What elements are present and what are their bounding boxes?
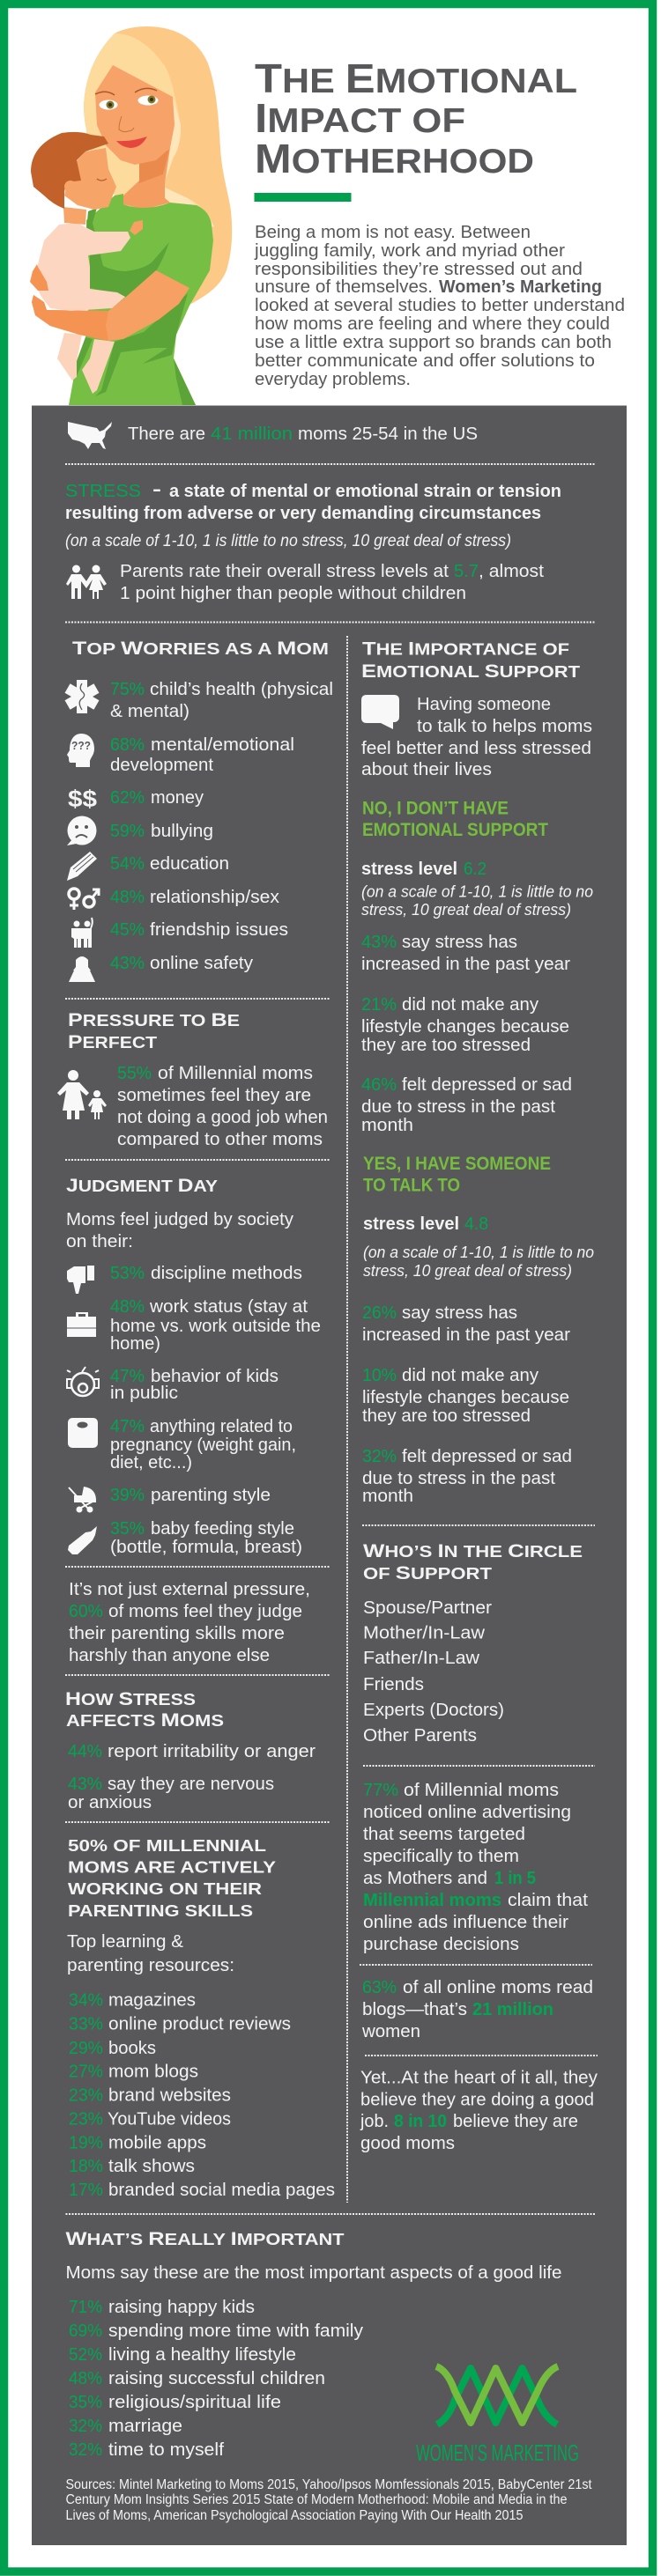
list: good life aspects: raising happy kids	[108, 2297, 255, 2317]
list: resources: 27%	[69, 2061, 103, 2082]
section: no emotional support: 21%	[361, 994, 397, 1015]
section: someone to talk to: TO TALK TO	[363, 1175, 460, 1196]
worry: friendship: 45%	[110, 919, 145, 940]
sources: Sources: Mintel Marketing to Moms 2015, Yahoo/Ipsos Momfessionals 2015, BabyCenter 21st	[65, 2477, 592, 2492]
list: resources: 18%	[69, 2156, 103, 2176]
list: resources: 29%	[69, 2038, 103, 2058]
section: someone to talk to: lifestyle changes because	[362, 1387, 569, 1407]
list: good life aspects: 32%	[69, 2416, 102, 2436]
judged: behavior of kids: in public	[110, 1383, 178, 1403]
list: good life aspects: religious/spiritual life	[108, 2392, 281, 2412]
text block: good moms: believe they are doing a good	[360, 2089, 594, 2110]
dress shading	[77, 208, 196, 405]
section: no emotional support: lifestyle changes because	[361, 1016, 569, 1037]
intro paragraph: Being a mom is not easy. Between	[255, 223, 531, 242]
section: no emotional support: increased in the past year	[361, 954, 570, 974]
section: someone to talk to: they are too stressed	[362, 1406, 531, 1426]
judged: work status: work status (stay at	[149, 1296, 308, 1317]
section: someone to talk to: 26%	[362, 1303, 397, 1323]
baby body	[37, 223, 130, 311]
section: circle of support: Spouse/Partner	[363, 1598, 492, 1618]
text block: online advertising: online ads influence their	[363, 1912, 568, 1932]
eyes, brows, nose and lips	[95, 88, 159, 148]
section: pressure to be perfect: not doing a good job when	[117, 1107, 328, 1127]
section: what's really important: Moms say these are the most important aspects of a good life	[65, 2262, 562, 2283]
section: no emotional support	[361, 798, 593, 1135]
section: no emotional support: month	[361, 1115, 413, 1135]
worry: online safety: online safety	[150, 953, 254, 973]
worry: money	[68, 786, 204, 812]
list: resources: 17%	[69, 2180, 103, 2200]
judged: behavior of kids: 47%	[110, 1366, 145, 1386]
title: IMPACT OF	[255, 95, 465, 141]
worry: bullying	[67, 816, 213, 845]
fact: moms in the US: There are	[128, 424, 205, 444]
list: good life aspects: marriage	[108, 2416, 182, 2436]
worry: online safety	[69, 953, 254, 982]
illustration: mother holding baby	[30, 26, 232, 405]
text block: self judgment: 60%	[69, 1601, 103, 1621]
fact: parents stress: , almost	[479, 561, 544, 581]
text block: online advertising: noticed online advertising	[363, 1802, 571, 1822]
worry: mental development	[67, 734, 294, 775]
section: pressure to be perfect: of Millennial moms	[158, 1063, 313, 1083]
worry: child's health	[65, 679, 333, 721]
section: pressure to be perfect: sometimes feel they are	[117, 1085, 311, 1105]
icon: speech bubble	[361, 695, 399, 729]
section: circle of support	[363, 1541, 583, 1746]
list: good life aspects: spending more time with family	[108, 2321, 364, 2341]
text block: good moms: job.	[360, 2111, 389, 2131]
worry: relationship	[69, 887, 280, 910]
section: someone to talk to: 4.8	[464, 1214, 488, 1234]
section: no emotional support: 43%	[361, 932, 397, 952]
section: how stress affects moms	[65, 1689, 316, 1812]
stress definition: -	[152, 479, 161, 499]
section: circle of support: Mother/In-Law	[363, 1622, 485, 1643]
judged: feeding style: baby feeding style	[151, 1518, 294, 1539]
list: resources: YouTube videos	[108, 2108, 231, 2129]
section: someone to talk to: due to stress in the past	[362, 1468, 555, 1488]
list: good life aspects: raising successful children	[108, 2368, 325, 2388]
text block: good moms: good moms	[360, 2133, 455, 2153]
fact: parents stress: 5.7	[454, 561, 479, 581]
worry: relationship: 48%	[110, 887, 145, 907]
section: someone to talk to: felt depressed or sad	[402, 1446, 572, 1466]
worry: bullying: 59%	[110, 821, 145, 841]
worry: mental development: 68%	[110, 734, 145, 755]
section: no emotional support: stress level	[361, 859, 457, 879]
text block: online advertising: 77%	[363, 1780, 398, 1800]
text block: online advertising: specifically to them	[363, 1846, 519, 1866]
list: resources: 23%	[69, 2108, 103, 2129]
judged: parenting style	[69, 1485, 271, 1513]
judged: pregnancy	[68, 1416, 296, 1473]
section: someone to talk to: stress, 10 great deal of stress)	[363, 1262, 572, 1280]
list: good life aspects	[69, 2297, 364, 2460]
section: no emotional support: (on a scale of 1-10, 1 is little to no	[361, 882, 593, 900]
text block: blogs: 63%	[362, 1977, 397, 1997]
icon: US map	[68, 422, 112, 449]
worry: education: education	[150, 853, 229, 874]
baby legs	[57, 333, 115, 394]
worry: education	[67, 852, 229, 881]
sources: Lives of Moms, American Psychological Association Paying With Our Health 2015	[65, 2508, 524, 2523]
list: resources: 33%	[69, 2013, 103, 2034]
intro paragraph: juggling family, work and myriad other	[254, 241, 565, 261]
section: parenting skills: PARENTING SKILLS	[68, 1902, 253, 1920]
section: someone to talk to: 32%	[362, 1446, 397, 1466]
section: parenting skills: Top learning &	[67, 1931, 183, 1952]
baby hand	[130, 220, 143, 235]
worry: child's health: 75%	[110, 679, 145, 699]
judged: discipline	[67, 1263, 302, 1294]
fact: parents stress	[66, 561, 544, 603]
text block: online advertising	[363, 1780, 588, 1954]
judged: parenting style: parenting style	[151, 1485, 271, 1505]
section: circle of support: OF SUPPORT	[363, 1563, 492, 1583]
stress definition	[65, 479, 561, 550]
judged: work status: home vs. work outside the	[110, 1316, 321, 1336]
section: parenting skills	[67, 1837, 335, 2200]
section: parenting skills: WORKING ON THEIR	[68, 1880, 262, 1898]
text block: good moms: 8 in 10	[394, 2111, 447, 2131]
section: pressure to be perfect	[57, 1010, 328, 1149]
fact: moms in the US: moms 25-54 in the US	[298, 424, 478, 444]
text block: self judgment: of moms feel they judge	[108, 1601, 302, 1621]
section: circle of support: Experts (Doctors)	[363, 1700, 504, 1720]
worry: mental development: ???	[71, 739, 91, 752]
stress definition: a state of mental or emotional strain or tension	[169, 481, 561, 501]
judged: feeding style	[68, 1518, 302, 1557]
mother arm	[32, 270, 189, 341]
sources: Century Mom Insights Series 2015 State of Modern Motherhood: Mobile and Media in the	[65, 2492, 568, 2507]
intro paragraph: everyday problems.	[255, 370, 411, 389]
intro paragraph: looked at several studies to better understand	[255, 296, 625, 315]
sources	[65, 2477, 592, 2523]
worry: money: $$	[68, 786, 97, 812]
section: no emotional support: did not make any	[402, 994, 539, 1015]
list: good life aspects: time to myself	[108, 2439, 224, 2460]
icon: two parents	[66, 565, 107, 599]
section: how stress affects moms: say they are nervous	[108, 1774, 274, 1794]
text block: online advertising: that seems targeted	[363, 1824, 525, 1844]
judged: pregnancy: 47%	[110, 1416, 145, 1436]
title rule	[254, 193, 351, 202]
list: good life aspects: 71%	[69, 2297, 102, 2317]
section: how stress affects moms: report irritability or anger	[108, 1741, 316, 1761]
text block: online advertising: as Mothers and	[363, 1868, 487, 1888]
text block: self judgment: It’s not just external pressure,	[69, 1579, 310, 1599]
judged: behavior of kids	[67, 1366, 279, 1403]
list: good life aspects: 35%	[69, 2392, 102, 2412]
worry: child's health: child’s health (physical	[150, 679, 333, 699]
text block: blogs: women	[361, 2021, 420, 2041]
section: importance of emotional support: about their lives	[361, 759, 492, 779]
list: resources: online product reviews	[108, 2013, 291, 2034]
section: no emotional support: they are too stressed	[361, 1035, 531, 1055]
section: circle of support: Other Parents	[363, 1725, 477, 1746]
title: THE EMOTIONAL	[255, 55, 577, 101]
worry: money: 62%	[110, 787, 145, 808]
section: parenting skills: MOMS ARE ACTIVELY	[68, 1858, 276, 1876]
judged: work status: 48%	[110, 1296, 145, 1317]
stress definition: STRESS	[65, 481, 141, 501]
list: resources: 34%	[69, 1990, 103, 2010]
text block: good moms	[360, 2068, 598, 2153]
section: judgment day: JUDGMENT DAY	[66, 1176, 218, 1196]
intro paragraph: better communicate and offer solutions to	[255, 351, 595, 371]
section: what's really important	[65, 2229, 562, 2460]
section: pressure to be perfect: PERFECT	[68, 1032, 157, 1052]
section: no emotional support: due to stress in the past	[361, 1096, 555, 1117]
section: pressure to be perfect: PRESSURE TO BE	[68, 1010, 240, 1030]
fact: parents stress: 1 point higher than people without children	[120, 583, 466, 603]
text block: good moms: believe they are	[453, 2111, 578, 2131]
list: good life aspects: living a healthy lifestyle	[108, 2344, 296, 2365]
text block: blogs: of all online moms read	[403, 1977, 593, 1997]
judged: feeding style: (bottle, formula, breast)	[110, 1537, 302, 1557]
baby head	[63, 207, 86, 225]
section: no emotional support: EMOTIONAL SUPPORT	[362, 820, 548, 840]
text block: good moms: Yet...At the heart of it all, they	[360, 2068, 598, 2087]
logo: Women's Marketing	[416, 2366, 579, 2466]
section: how stress affects moms: 43%	[68, 1774, 102, 1794]
mother face	[95, 65, 175, 165]
section: someone to talk to	[362, 1154, 594, 1506]
text block: self judgment	[69, 1579, 310, 1665]
judged: behavior of kids: behavior of kids	[151, 1366, 279, 1386]
fact: parents stress: Parents rate their overall stress levels at	[120, 561, 449, 581]
section: pressure to be perfect: 55%	[117, 1063, 152, 1083]
section: what's really important: WHAT’S REALLY IMPORTANT	[65, 2229, 345, 2249]
fact: moms in the US	[68, 422, 478, 449]
stress definition: (on a scale of 1-10, 1 is little to no stress, 10 great deal of stress)	[65, 532, 511, 550]
section: importance of emotional support	[361, 639, 592, 779]
section: no emotional support: 46%	[361, 1074, 397, 1095]
intro paragraph: how moms are feeling and where they could	[255, 314, 610, 334]
dress	[69, 194, 213, 405]
section: parenting skills: 50% OF MILLENNIAL	[68, 1837, 266, 1855]
list: resources	[69, 1990, 335, 2200]
judged: work status: home)	[110, 1333, 160, 1354]
section: judgment day: Moms feel judged by society	[66, 1209, 294, 1229]
section: importance of emotional support: Having someone	[417, 694, 551, 714]
section: how stress affects moms: 44%	[68, 1741, 102, 1761]
worry: mental development: development	[110, 755, 213, 775]
intro paragraph	[254, 223, 625, 389]
judged: pregnancy: diet, etc...)	[110, 1452, 192, 1473]
text block: blogs: blogs—that’s	[362, 1999, 467, 2019]
section: pressure to be perfect: compared to other moms	[117, 1129, 323, 1149]
intro paragraph: unsure of themselves.	[255, 277, 433, 297]
fact: moms in the US: 41 million	[211, 424, 293, 444]
text block: online advertising: 1 in 5	[494, 1868, 536, 1888]
worry: education: 54%	[110, 853, 145, 874]
worry: child's health: & mental)	[110, 701, 189, 721]
section: circle of support: Father/In-Law	[363, 1648, 479, 1668]
title: MOTHERHOOD	[255, 136, 534, 181]
section: how stress affects moms: HOW STRESS	[65, 1689, 196, 1709]
section: circle of support: Friends	[363, 1674, 424, 1694]
section: judgment day: on their:	[66, 1231, 133, 1251]
list: good life aspects: 69%	[69, 2321, 102, 2341]
section: judgment day	[66, 1176, 321, 1557]
judged: discipline: 53%	[110, 1263, 145, 1283]
list: good life aspects: 48%	[69, 2368, 102, 2388]
worry: friendship	[71, 918, 288, 948]
list: resources: brand websites	[108, 2085, 231, 2105]
text block: online advertising: claim that	[508, 1890, 588, 1910]
worry: online safety: 43%	[110, 953, 145, 973]
section: someone to talk to: increased in the past year	[362, 1325, 570, 1345]
intro paragraph: responsibilities they’re stressed out and	[255, 260, 583, 279]
section: how stress affects moms: or anxious	[68, 1792, 152, 1812]
judged: discipline: discipline methods	[151, 1263, 302, 1283]
section: importance of emotional support: to talk to helps moms	[417, 716, 592, 736]
section: no emotional support: 6.2	[464, 859, 486, 879]
section: someone to talk to: did not make any	[402, 1365, 539, 1385]
text block: blogs	[361, 1977, 593, 2041]
text block: online advertising: of Millennial moms	[404, 1780, 559, 1800]
section: parenting skills: parenting resources:	[67, 1955, 234, 1975]
stress definition: resulting from adverse or very demanding circumstances	[65, 503, 541, 523]
list: resources: books	[108, 2038, 156, 2058]
worry: money: money	[151, 787, 204, 808]
text block: self judgment: harshly than anyone else	[69, 1645, 270, 1665]
list: resources: mobile apps	[108, 2133, 206, 2152]
section: someone to talk to: say stress has	[402, 1303, 517, 1323]
list: resources: talk shows	[108, 2156, 195, 2176]
title	[255, 55, 577, 181]
section: someone to talk to: month	[362, 1486, 413, 1506]
text block: online advertising: Millennial moms	[363, 1890, 501, 1910]
list: resources: mom blogs	[108, 2061, 198, 2082]
section: someone to talk to: YES, I HAVE SOMEONE	[363, 1154, 551, 1174]
worry: mental development: mental/emotional	[151, 734, 294, 755]
section: someone to talk to: stress level	[363, 1214, 459, 1234]
section: no emotional support: say stress has	[402, 932, 517, 952]
section: someone to talk to: 10%	[362, 1365, 397, 1385]
worry: friendship: friendship issues	[150, 919, 288, 940]
section: importance of emotional support: THE IMPORTANCE OF	[362, 639, 569, 659]
list: good life aspects: 32%	[69, 2439, 102, 2460]
list: resources: branded social media pages	[108, 2180, 335, 2200]
text block: online advertising: purchase decisions	[363, 1934, 519, 1954]
icon: mother and child	[57, 1070, 107, 1119]
panel: dark background	[32, 405, 627, 2545]
section: no emotional support: felt depressed or sad	[402, 1074, 572, 1095]
worry: bullying: bullying	[151, 821, 213, 841]
section: how stress affects moms: AFFECTS MOMS	[66, 1710, 224, 1731]
judged: work status	[67, 1296, 321, 1354]
heading: top worries: TOP W ORRIES AS A M OM	[72, 638, 329, 659]
judged: feeding style: 35%	[110, 1518, 145, 1539]
section: circle of support: W HO’S IN THE CIRCLE	[363, 1541, 583, 1561]
section: someone to talk to: (on a scale of 1-10, 1 is little to no	[363, 1244, 594, 1261]
section: importance of emotional support: feel better and less stressed	[361, 738, 591, 758]
section: top worries	[65, 638, 333, 982]
list: good life aspects: 52%	[69, 2344, 102, 2365]
section: no emotional support: stress, 10 great deal of stress)	[361, 901, 571, 919]
list: resources: magazines	[108, 1990, 196, 2010]
list: resources: 19%	[69, 2133, 103, 2152]
section: no emotional support: NO, I DON’T HAVE	[362, 798, 509, 819]
judged: pregnancy: pregnancy (weight gain,	[110, 1435, 296, 1455]
judged: pregnancy: anything related to	[150, 1416, 293, 1436]
worry: relationship: relationship/sex	[150, 887, 280, 907]
text block: self judgment: their parenting skills more	[69, 1623, 285, 1643]
intro paragraph: use a little extra support so brands can both	[255, 333, 612, 352]
mother hand	[30, 264, 48, 291]
text block: blogs: 21 million	[472, 1999, 553, 2019]
section: importance of emotional support: EMOTIONAL SUPPORT	[361, 661, 580, 682]
judged: parenting style: 39%	[110, 1485, 145, 1505]
mother neck	[123, 148, 170, 210]
list: resources: 23%	[69, 2085, 103, 2105]
intro paragraph: Women’s Marketing	[439, 277, 602, 297]
